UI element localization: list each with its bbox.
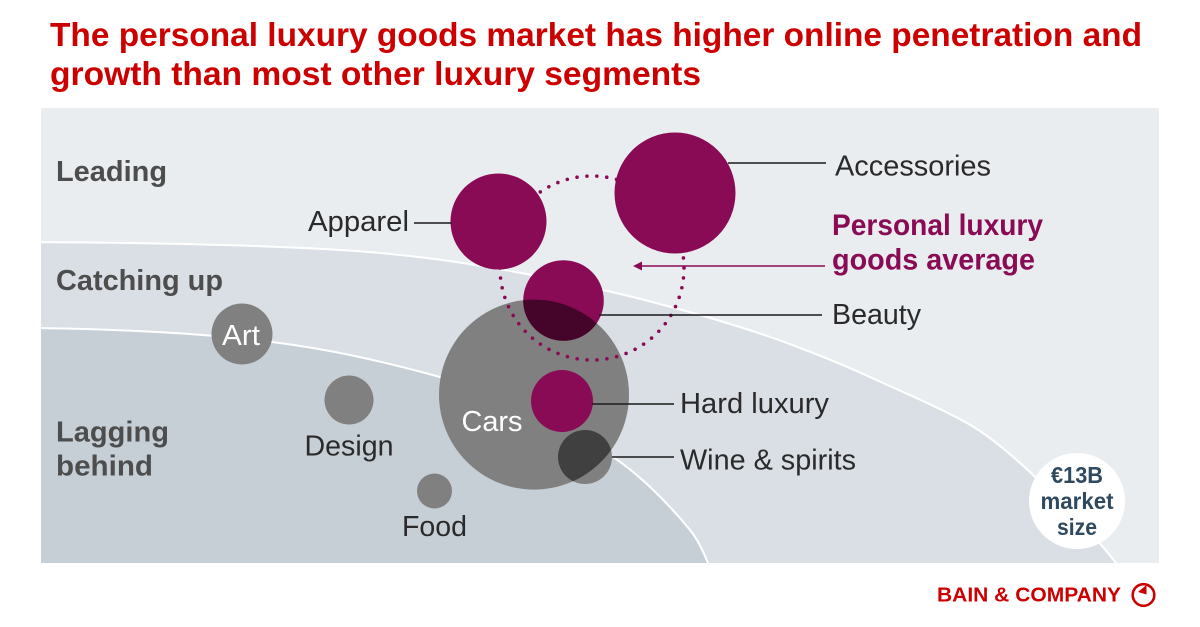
legend: market size: market bbox=[1040, 488, 1114, 514]
heading: Catching up: Catching up bbox=[56, 265, 223, 297]
heading: Lagging behind: behind bbox=[56, 450, 153, 482]
heading: Lagging behind: Lagging bbox=[56, 416, 169, 448]
bubble: Design bbox=[304, 376, 394, 462]
legend: market size: size bbox=[1057, 514, 1097, 540]
title bbox=[50, 16, 1142, 92]
bubble: Art: Art bbox=[222, 320, 260, 352]
bubble: Food: Food bbox=[402, 511, 467, 543]
legend: market size: €13B bbox=[1051, 462, 1103, 488]
bubble: Apparel bbox=[308, 174, 546, 270]
bubble: Design: Design bbox=[304, 430, 394, 462]
title: growth than most other luxury segments bbox=[50, 55, 701, 92]
bubble: Food bbox=[402, 474, 467, 543]
bubble: Wine & spirits: Wine & spirits bbox=[680, 444, 856, 476]
bubble: Hard luxury bbox=[531, 370, 829, 432]
bubble: Wine & spirits bbox=[558, 430, 856, 484]
bubble: Cars: Cars bbox=[462, 406, 522, 438]
heading: Lagging behind bbox=[56, 416, 169, 482]
title: The personal luxury goods market has higher online penetration and bbox=[50, 16, 1142, 53]
bubble: Art bbox=[212, 304, 272, 364]
arrow: average pointer bbox=[633, 262, 825, 270]
logo: Bain & Company: BAIN & COMPANY bbox=[937, 584, 1122, 606]
callout: Personal luxury goods average: goods average bbox=[832, 244, 1035, 276]
heading: Leading: Leading bbox=[56, 156, 167, 188]
callout: Personal luxury goods average: Personal luxury bbox=[832, 209, 1043, 242]
callout: Personal luxury goods average bbox=[832, 209, 1043, 276]
legend: market size bbox=[1029, 453, 1125, 549]
bubble: Accessories: Accessories bbox=[835, 150, 991, 182]
dotted circle: personal luxury goods average bbox=[500, 176, 684, 360]
bubble: Apparel: Apparel bbox=[308, 206, 409, 238]
bubble: Accessories bbox=[614, 132, 991, 254]
bubble: Beauty: Beauty bbox=[832, 299, 921, 331]
bubble: Cars bbox=[439, 300, 629, 490]
bubble: Hard luxury: Hard luxury bbox=[680, 388, 829, 420]
bubble: Beauty bbox=[523, 260, 921, 341]
panel: market maturity zones bbox=[30, 108, 1159, 580]
